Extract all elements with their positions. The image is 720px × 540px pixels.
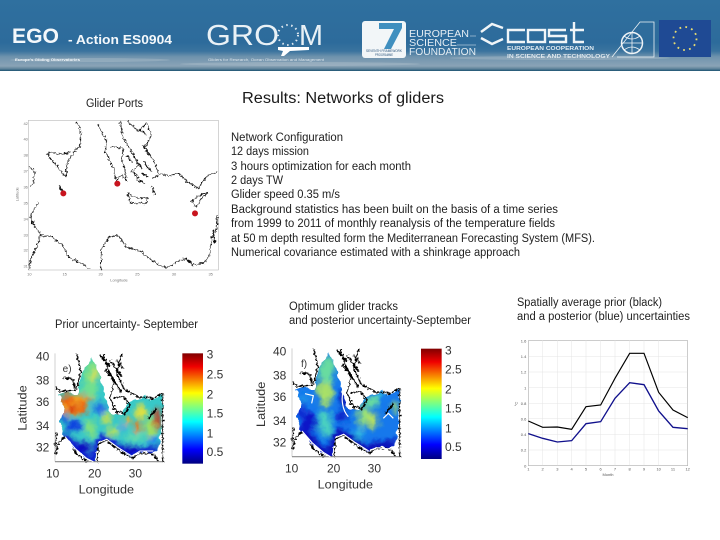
axis labels: 40 [36, 350, 50, 364]
text block: network configuration: 2 days TW [231, 175, 283, 187]
chart: posterior uncertainty heat map: 3 [445, 343, 452, 357]
caption: spatially averaged uncertainties: Spatially average prior (black) [517, 297, 662, 309]
axis labels: 32 [36, 441, 50, 455]
axis labels: 0 [524, 463, 527, 468]
heat field [295, 352, 402, 456]
chart: monthly average uncertainty line chart: 9 [643, 467, 646, 472]
axis labels: 20 [88, 466, 102, 480]
axis labels: 10 [285, 461, 299, 475]
axis labels [15, 121, 214, 282]
axis labels: 36 [273, 390, 287, 404]
axis labels: 31 [23, 263, 29, 268]
axis labels: 34 [36, 419, 50, 433]
logo: GROOM: GRO [206, 20, 279, 52]
axis labels: 42 [23, 121, 29, 126]
coastlines [29, 121, 217, 269]
caption: prior uncertainty: Prior uncertainty- September [55, 319, 198, 331]
chart: posterior uncertainty heat map: 0.5 [445, 440, 462, 454]
logo: EU flag [659, 20, 711, 57]
logo: EGO [12, 25, 172, 62]
land and coastline [55, 354, 163, 462]
chart: prior uncertainty heat map: 1.5 [207, 406, 224, 420]
logo: European Science Foundation: EUROPEAN [409, 28, 469, 40]
chart: monthly average uncertainty line chart: 6 [600, 467, 603, 472]
chart: glider ports map [15, 120, 218, 282]
logo: FP7 [362, 21, 406, 58]
text block: network configuration: at 50 m depth resulted form the Mediterranean Forecasting System (MFS). [231, 233, 595, 245]
text block: network configuration: Numerical covariance estimated with a shinkrage approach [231, 247, 520, 259]
caption: spatially averaged uncertainties: and a posterior (blue) uncertainties [517, 311, 690, 323]
text block: network configuration: from 1999 to 2011 of monthly reanalysis of the temperature fields [231, 218, 555, 230]
axis labels: 0.4 [521, 432, 527, 437]
axis labels: 1.2 [521, 370, 527, 375]
axis labels: 15 [62, 272, 68, 277]
axis labels: 38 [23, 152, 29, 157]
axis labels: 30 [129, 466, 142, 480]
axis labels: 35 [23, 200, 29, 205]
axis labels: 1 [524, 385, 527, 390]
axis labels: 25 [135, 272, 140, 277]
axis labels: 0.6 [521, 416, 527, 421]
axis labels [521, 338, 527, 468]
posterior line (blue) [528, 383, 688, 442]
chart: monthly average uncertainty line chart: Month [602, 472, 614, 477]
chart: monthly average uncertainty line chart: 8 [629, 467, 632, 472]
axis labels: 10 [46, 466, 60, 480]
chart: monthly average uncertainty line chart: 7 [614, 467, 617, 472]
axis labels: Latitude [254, 381, 268, 427]
chart: prior uncertainty heat map: 0.5 [207, 445, 224, 459]
axis labels: 33 [23, 232, 29, 237]
chart: monthly average uncertainty line chart: 2 [542, 467, 545, 472]
prior line (black) [528, 353, 688, 429]
axis labels: 36 [36, 395, 50, 409]
caption: optimum glider tracks [289, 301, 471, 327]
chart: monthly average uncertainty line chart: 5 [585, 467, 588, 472]
text block: network configuration: 3 hours optimization for each month [231, 161, 411, 173]
chart: prior uncertainty heat map: 2.5 [207, 368, 224, 382]
axis labels: 34 [23, 216, 29, 221]
axis labels: 37 [23, 168, 29, 173]
axis labels: Longitude [110, 277, 129, 282]
axis labels: 1.6 [521, 338, 527, 343]
chart: prior uncertainty heat map: 3 [207, 348, 214, 362]
color bar [182, 353, 203, 464]
logo: globe emblem [612, 22, 654, 57]
axis labels: 36 [23, 184, 29, 189]
chart: posterior uncertainty heat map: 2 [445, 383, 452, 397]
logo: COST: IN SCIENCE AND TECHNOLOGY [507, 54, 610, 60]
chart: posterior uncertainty heat map [254, 343, 462, 492]
axis labels: 34 [273, 414, 287, 428]
axis labels: 30 [172, 272, 177, 277]
axis labels: 40 [273, 345, 287, 359]
chart: posterior uncertainty heat map: 1.5 [445, 401, 462, 415]
logo: GROOM: M [299, 20, 323, 52]
caption: spatially averaged uncertainties [517, 297, 690, 323]
text block: network configuration: Glider speed 0.35 m/s [231, 189, 340, 201]
caption: optimum glider tracks: and posterior uncertainty-September [289, 315, 471, 327]
axis labels: 40 [23, 136, 29, 141]
axis labels [254, 345, 381, 492]
logo: GROOM: Gliders for Research, Ocean Observation and Management [208, 57, 325, 62]
chart: monthly average uncertainty line chart: 10 [656, 467, 662, 472]
axis labels: 20 [98, 272, 104, 277]
logo: EGO: EGO [12, 25, 59, 48]
chart: prior uncertainty heat map: 1 [207, 426, 214, 440]
glider port markers [60, 181, 198, 216]
white edge of sea mask [65, 437, 153, 462]
text block: network configuration: Background statistics has been built on the basis of a time series [231, 204, 558, 216]
logo: GROOM [206, 20, 325, 62]
text block: network configuration [231, 132, 595, 259]
logo: COST: EUROPEAN COOPERATION [507, 46, 594, 52]
heat field [58, 358, 164, 462]
axis labels: 0.8 [521, 401, 527, 406]
axis labels: 0.2 [521, 448, 527, 453]
chart: monthly average uncertainty line chart: 12 [685, 467, 691, 472]
axis labels: 38 [36, 374, 50, 388]
chart: monthly average uncertainty line chart [514, 338, 691, 477]
axis labels: 30 [368, 461, 381, 475]
header banner [0, 0, 720, 71]
heading: glider ports: Glider Ports [86, 98, 143, 110]
logo: European Science Foundation: SCIENCE [409, 37, 457, 49]
chart: monthly average uncertainty line chart: 3 [556, 467, 559, 472]
chart: posterior uncertainty heat map: 2.5 [445, 363, 462, 377]
axis labels [16, 350, 142, 497]
chart: monthly average uncertainty line chart: 11 [671, 467, 676, 472]
chart: monthly average uncertainty line chart: °C [514, 402, 519, 406]
axis labels: 20 [327, 461, 341, 475]
logo: FP7: PROGRAMME [375, 53, 394, 57]
axis labels: Latitude [16, 385, 30, 431]
axis labels: 1.4 [521, 354, 527, 359]
text block: network configuration: 12 days mission [231, 146, 309, 158]
axis labels: f) [301, 359, 307, 370]
chart: posterior uncertainty heat map: 1 [445, 421, 452, 435]
heading: results: Results: Networks of gliders [242, 90, 444, 107]
axis labels: 35 [208, 272, 214, 277]
axis labels: 38 [273, 369, 287, 383]
axis labels: 32 [273, 436, 287, 450]
axis labels: Longitude [318, 478, 373, 492]
axis labels: e) [63, 364, 72, 375]
caption: optimum glider tracks: Optimum glider tracks [289, 301, 398, 313]
axis labels: 32 [23, 248, 29, 253]
chart: monthly average uncertainty line chart: 4 [571, 467, 574, 472]
chart: monthly average uncertainty line chart: 1 [527, 467, 530, 472]
glider tracks [302, 390, 395, 457]
chart: prior uncertainty heat map: 2 [207, 388, 214, 402]
chart: prior uncertainty heat map [16, 348, 224, 497]
logo: EGO: Europe's Gliding Observatories [15, 57, 81, 62]
axis labels: Longitude [79, 483, 134, 497]
logo: FP7: SEVENTH FRAMEWORK [366, 49, 403, 53]
logo: EGO: - Action ES0904 [68, 33, 172, 47]
land and coastline [292, 349, 400, 457]
color bar [421, 349, 442, 459]
axis labels: Latitude [15, 186, 20, 201]
logo: European Science Foundation: FOUNDATION [409, 46, 476, 58]
text block: network configuration: Network Configuration [231, 132, 343, 144]
logo: European Science Foundation [409, 28, 476, 58]
logo: COST [481, 22, 610, 60]
axis labels: 10 [27, 272, 32, 277]
